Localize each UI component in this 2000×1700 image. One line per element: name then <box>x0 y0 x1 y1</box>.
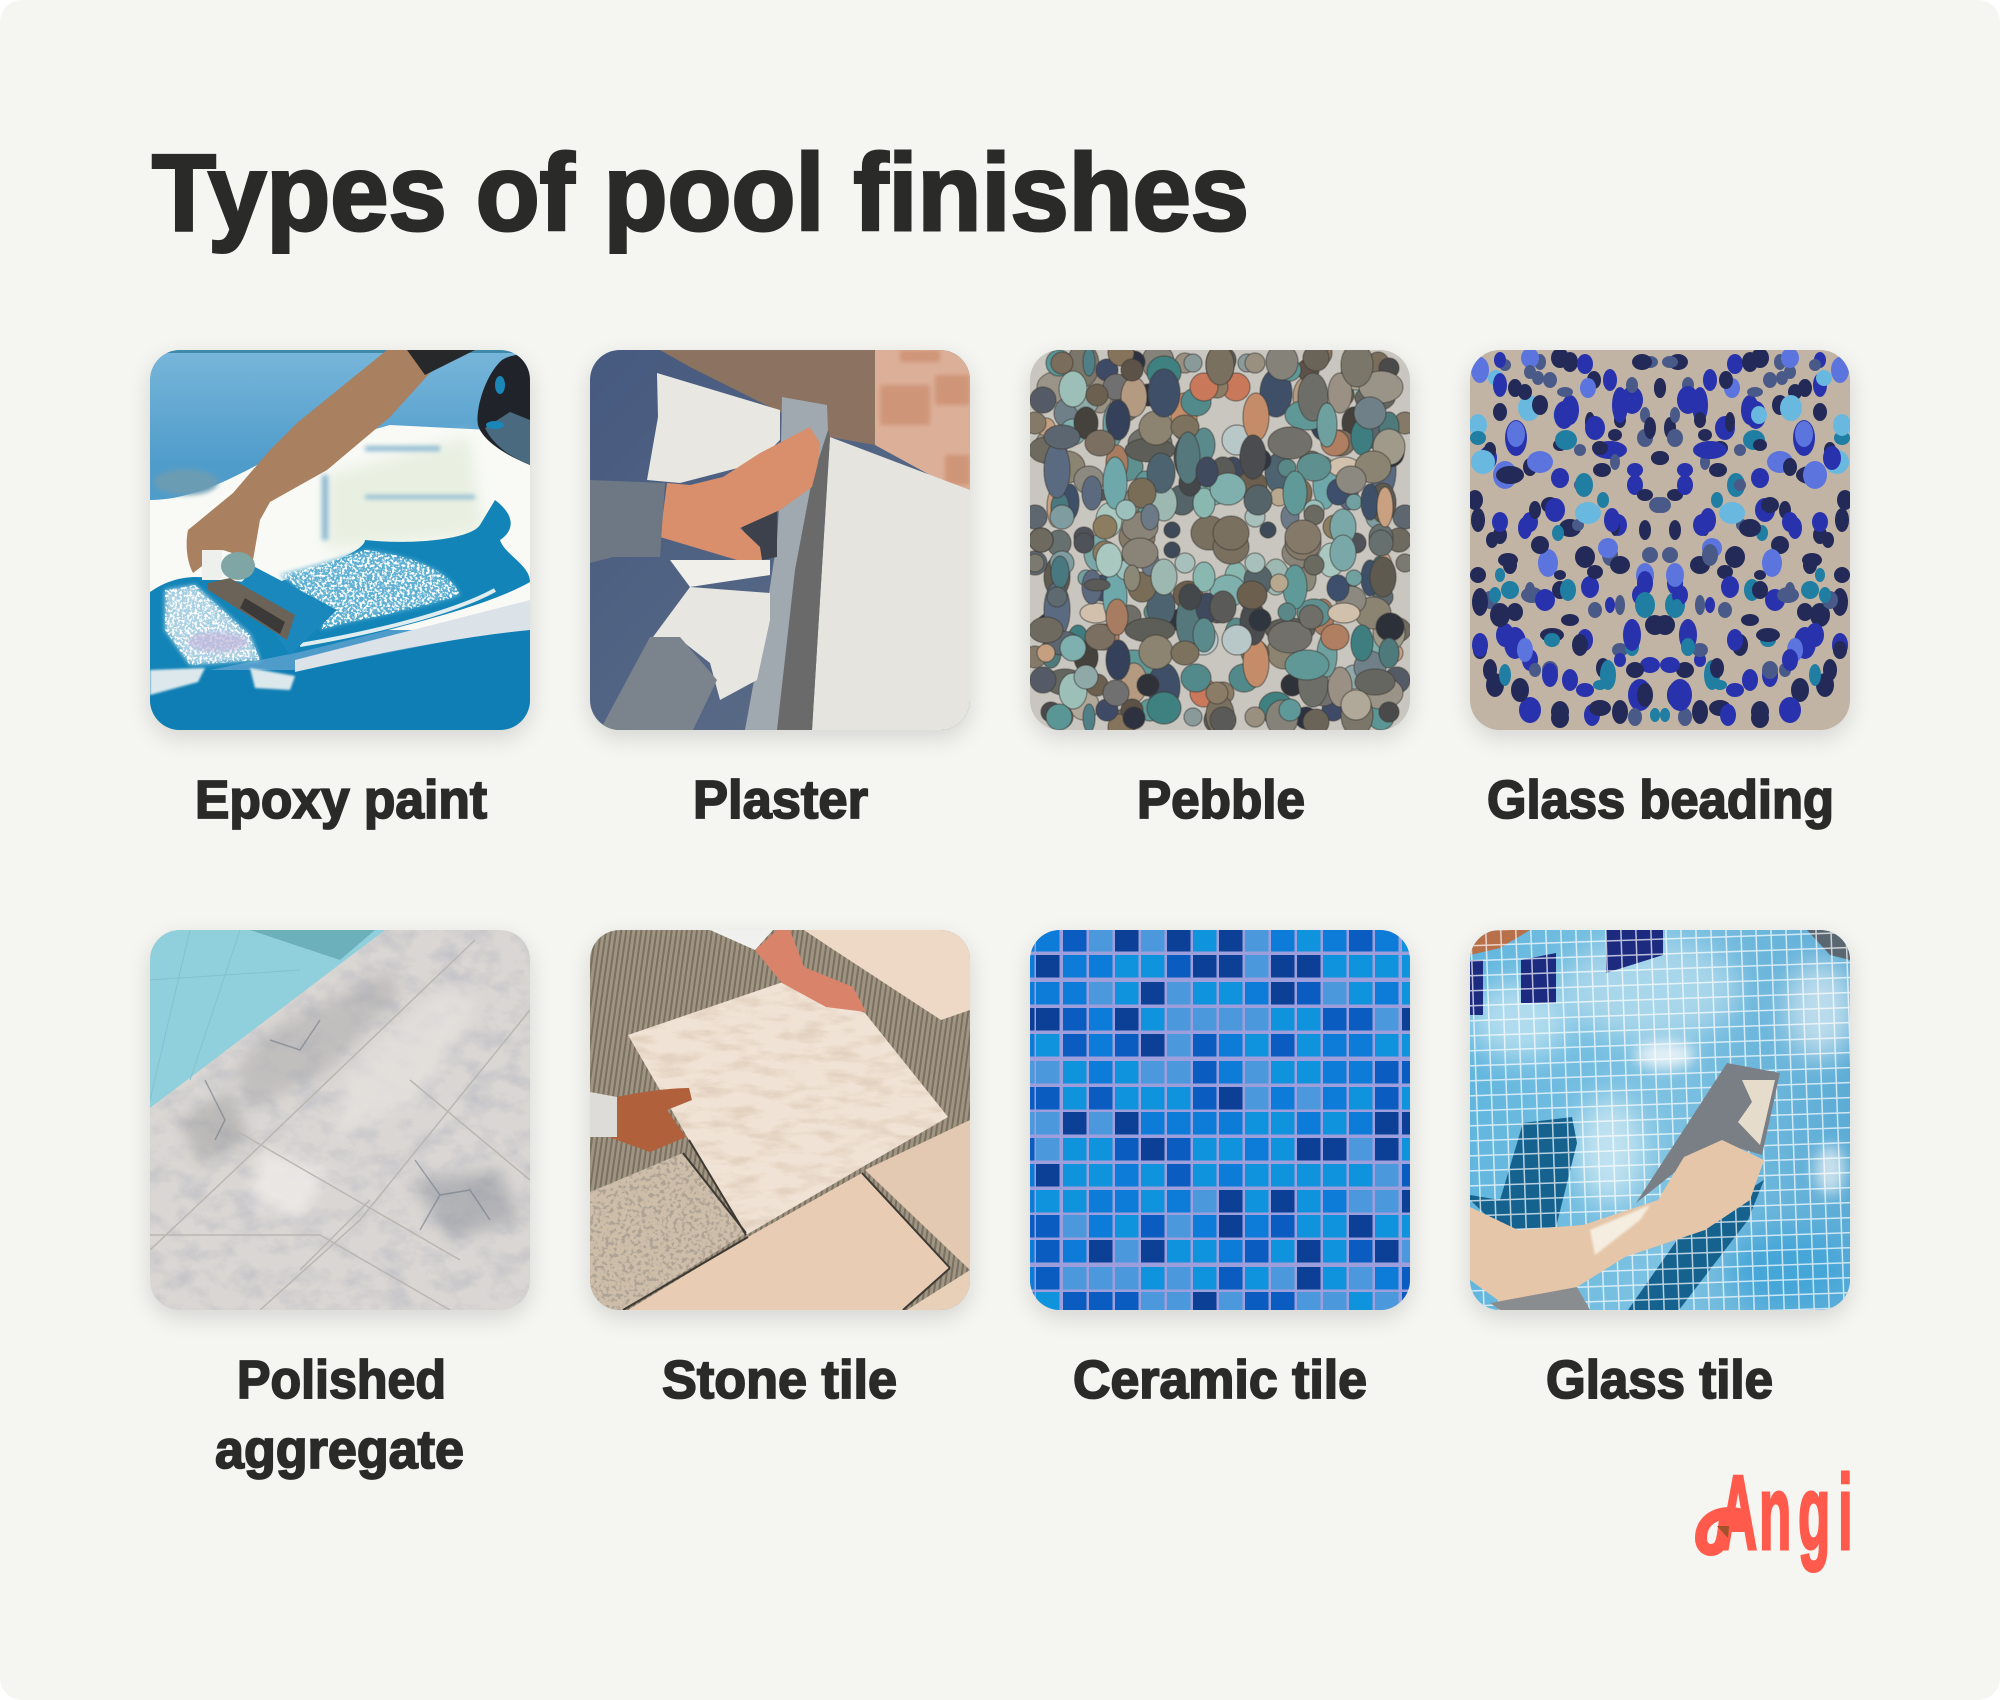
label: Pebble <box>1137 770 1305 830</box>
logo: Angi: g <box>1798 1453 1830 1572</box>
dark object <box>477 354 530 465</box>
label: Glass beading <box>1487 770 1834 830</box>
panel: stone tile <box>590 930 970 1410</box>
logo: Angi <box>1701 1453 1853 1572</box>
panel: pebble <box>1023 340 1417 830</box>
glove <box>653 587 770 700</box>
logo: Angi: A <box>1719 1453 1757 1572</box>
label: Stone tile <box>662 1350 897 1410</box>
trowel <box>1636 1063 1780 1203</box>
photo: marble-like pool deck <box>150 930 530 1310</box>
logo: Angi: i <box>1838 1453 1853 1572</box>
photo: hands plastering a wall <box>590 350 970 730</box>
label: Glass tile <box>1546 1350 1773 1410</box>
panel: ceramic tile <box>1011 929 1426 1410</box>
panel: glass beading <box>1467 348 1853 830</box>
hand <box>660 427 820 560</box>
photo: trowel spreading blue epoxy <box>150 350 530 730</box>
logo: Angi: n <box>1759 1453 1791 1572</box>
label: Ceramic tile <box>1073 1350 1367 1410</box>
panel: polished aggregate <box>150 930 530 1480</box>
pool water <box>150 930 385 1108</box>
panel: plaster <box>590 350 970 830</box>
photo: laying stone tile <box>590 930 970 1310</box>
photo: blue glass beads <box>1467 348 1853 730</box>
hands <box>755 930 866 1012</box>
label <box>215 1350 464 1480</box>
label: Epoxy paint <box>195 770 487 830</box>
photo: pebble finish <box>1023 340 1417 740</box>
photo: blue mosaic grid <box>1011 929 1426 1314</box>
title: Types of pool finishes <box>152 132 1249 254</box>
arm <box>1470 1140 1764 1303</box>
label: Polished <box>237 1350 446 1410</box>
panel: epoxy paint <box>150 350 530 830</box>
photo: grouting glass tile <box>1470 930 1855 1310</box>
navy tiles <box>1470 930 1663 1015</box>
label: Plaster <box>693 770 868 830</box>
arm <box>187 350 450 573</box>
arm shadow <box>1470 1117 1577 1230</box>
label: aggregate <box>215 1420 464 1480</box>
panel: glass tile <box>1470 930 1855 1410</box>
